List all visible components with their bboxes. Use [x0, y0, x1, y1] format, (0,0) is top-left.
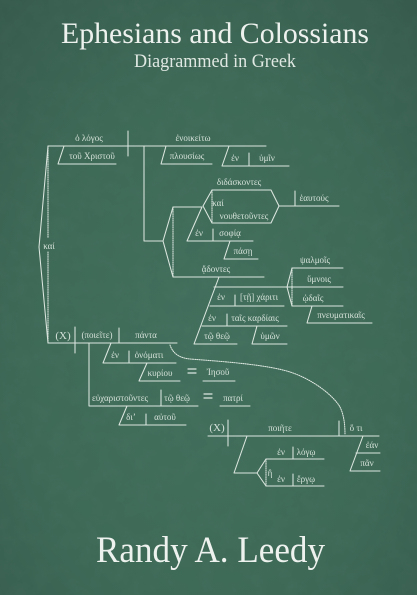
diagram: second clause, do all — [48, 327, 250, 425]
diagram: teaching and admonishing: ᾄδοντες — [202, 264, 231, 274]
diagram: second clause, do all: τῷ θεῷ — [164, 393, 190, 403]
diagram: singing modifiers: ὑμῶν — [260, 331, 280, 341]
diagram: teaching and admonishing: διδάσκοντες — [217, 177, 262, 187]
diagram: teaching and admonishing: πάσῃ — [234, 246, 253, 256]
diagram: singing modifiers: ὕμνοις — [307, 274, 331, 284]
diagram: teaching and admonishing: καί — [212, 198, 224, 208]
diagram: singing modifiers — [194, 255, 372, 344]
diagram: singing modifiers: ἐν — [217, 292, 225, 302]
diagram: main clause, word of Christ: ὁ λόγος — [75, 133, 103, 143]
diagram: main clause, word of Christ: ἐνοικείτω — [175, 133, 211, 143]
diagram: singing modifiers: ταῖς καρδίαις — [231, 313, 279, 323]
diagram: main clause, word of Christ: τοῦ Χριστοῦ — [69, 151, 115, 161]
diagram: teaching and admonishing — [163, 177, 339, 277]
diagram: teaching and admonishing: σοφίᾳ — [219, 228, 241, 238]
diagram: second clause, do all: (X) — [55, 330, 71, 342]
diagram: subordinate clause: λόγῳ — [297, 447, 315, 457]
diagram: subordinate clause: ἐν — [277, 447, 285, 457]
diagram: singing modifiers: ἐν — [208, 313, 216, 323]
diagram: second clause, do all: (ποιεῖτε) — [81, 330, 113, 340]
diagram: second clause, do all: ὀνόματι — [135, 350, 164, 360]
diagram: dotted connector — [170, 345, 345, 435]
diagram: singing modifiers: τῷ θεῷ — [204, 331, 230, 341]
diagram: main clause, word of Christ: ὑμῖν — [259, 153, 275, 163]
diagram: main clause, word of Christ: πλουσίως — [170, 151, 205, 161]
diagram: second clause, do all: εὐχαριστοῦντες — [92, 393, 148, 403]
diagram: subordinate clause: πᾶν — [360, 458, 374, 468]
diagram: subordinate clause: ποιῆτε — [268, 423, 292, 433]
diagram: subordinate clause: ὅ τι — [350, 423, 363, 433]
diagram: second clause, do all: Ἰησοῦ — [207, 367, 230, 377]
diagram: second clause, do all: ἐν — [111, 350, 119, 360]
diagram: subordinate clause: ἐν — [277, 474, 285, 484]
diagram: teaching and admonishing: νουθετοῦντες — [220, 211, 269, 221]
diagram: singing modifiers: [τῇ] χάριτι — [240, 292, 279, 302]
diagram: teaching and admonishing: ἑαυτούς — [299, 193, 329, 203]
diagram: subordinate clause — [208, 420, 380, 486]
diagram: second clause, do all: αὐτοῦ — [154, 412, 176, 422]
diagram: subordinate clause: (X) — [209, 422, 225, 434]
diagram: second clause, do all: κυρίου — [148, 368, 173, 378]
diagram: second clause, do all: διʼ — [126, 412, 136, 422]
diagram: subordinate clause: ἐάν — [366, 440, 378, 450]
author name: Randy A. Leedy — [96, 530, 325, 571]
subtitle: Diagrammed in Greek — [134, 52, 297, 72]
diagram: subordinate clause: ἔργῳ — [297, 474, 315, 484]
diagram: main clause, word of Christ — [48, 131, 289, 241]
diagram: teaching and admonishing: ἐν — [195, 228, 203, 238]
diagram: subordinate clause: ἢ — [268, 468, 273, 478]
diagram: singing modifiers: ψαλμοῖς — [300, 255, 330, 265]
diagram: conjunction bracket — [39, 146, 55, 343]
diagram: singing modifiers: πνευματικαῖς — [317, 310, 365, 320]
sentence diagram — [39, 131, 380, 486]
diagram: main clause, word of Christ: ἐν — [231, 153, 239, 163]
diagram: conjunction bracket: καί — [43, 241, 55, 251]
title: Ephesians and Colossians — [61, 18, 369, 50]
diagram: second clause, do all: πατρί — [223, 393, 243, 403]
diagram: second clause, do all: πάντα — [135, 330, 157, 340]
diagram: singing modifiers: ᾠδαῖς — [303, 293, 324, 303]
